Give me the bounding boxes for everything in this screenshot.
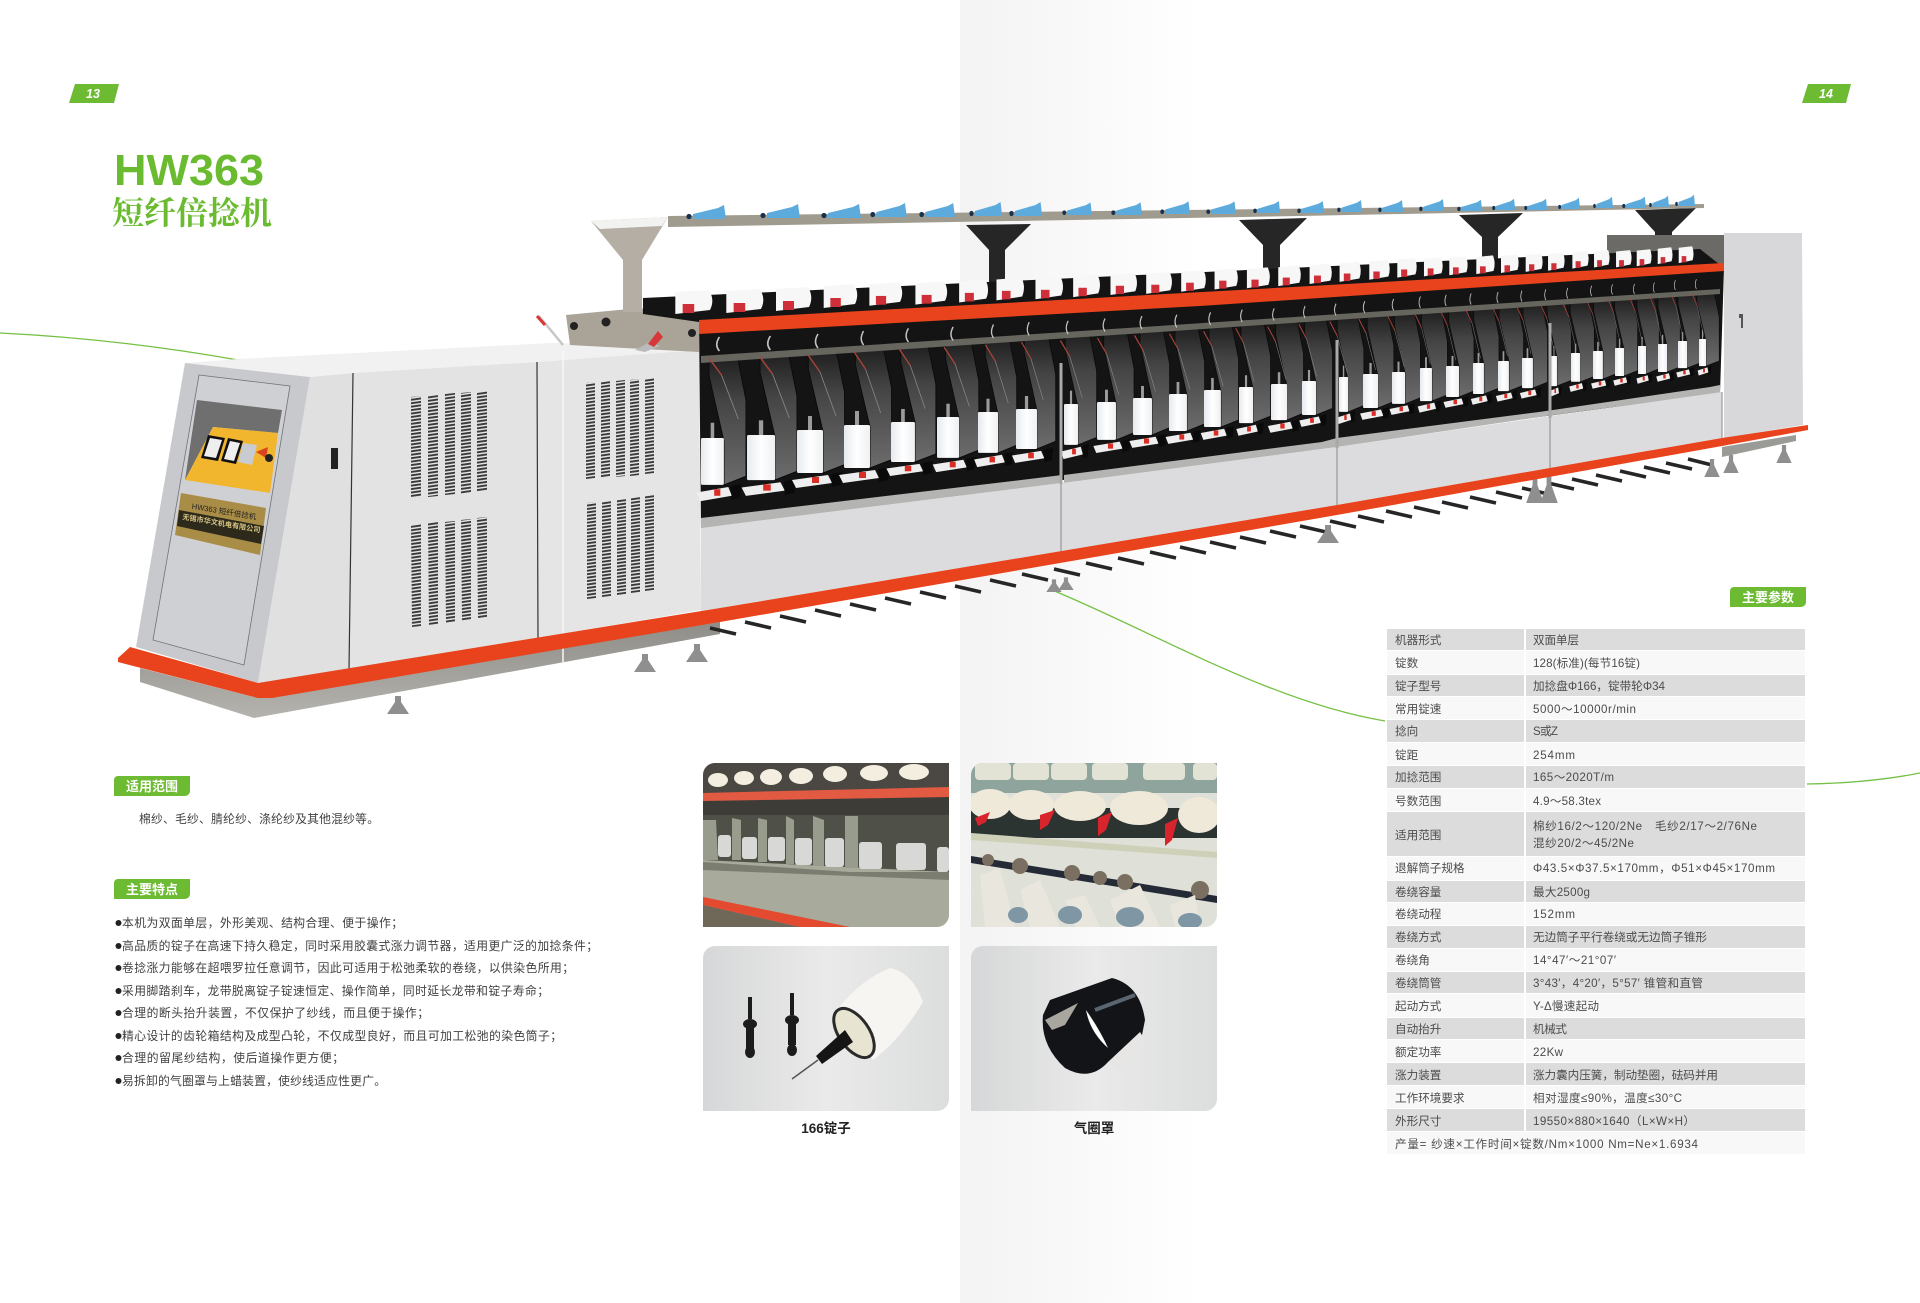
- specification table: 5000～10000r/min: [1533, 703, 1636, 716]
- spindles: [743, 993, 799, 1058]
- title: 短纤倍捻机: [112, 195, 272, 231]
- specification table: 加捻盘Φ166，锭带轮Φ34: [1533, 679, 1666, 693]
- control window: [185, 400, 282, 493]
- feature list: 高品质的锭子在高速下持久稳定，同时采用胶囊式涨力调节器，适用更广泛的加捻条件；: [122, 939, 598, 953]
- photo panel: balloon control ring: [971, 946, 1217, 1111]
- red upper rail: [699, 263, 1724, 334]
- specification table: S或Z: [1533, 725, 1558, 738]
- page number tag 13: 13: [86, 87, 100, 101]
- feature list: 合理的断头抬升装置，不仅保护了纱线，而且便于操作；: [122, 1006, 429, 1020]
- drive head mechanism: [537, 308, 699, 352]
- specification table: 卷绕角: [1395, 953, 1430, 967]
- machine base shadow and underframe: [140, 622, 720, 718]
- specification table: 152mm: [1533, 908, 1575, 921]
- title: [112, 146, 272, 231]
- page number tag 13: [69, 84, 119, 103]
- specification table: 19550×880×1640（L×W×H）: [1533, 1114, 1695, 1128]
- specification table: 涨力装置: [1395, 1068, 1441, 1082]
- applicable yarn text: 棉纱、毛纱、腈纶纱、涤纶纱及其他混纱等。: [139, 812, 379, 826]
- nameplate: 无锡市华文机电有限公司: [182, 512, 261, 535]
- twisting heads row: [675, 246, 1704, 419]
- separator plates: [709, 290, 1719, 485]
- red base strip: [118, 425, 1808, 698]
- feature list: 采用脚踏刹车，龙带脱离锭子锭速恒定、操作简单，同时延长龙带和锭子寿命；: [122, 984, 549, 998]
- section posts: [1061, 323, 1550, 484]
- specification table: 混纱20/2～45/2Ne: [1533, 837, 1634, 850]
- creel supports: dark funnels: [966, 208, 1696, 285]
- ventilation slots: [411, 378, 654, 627]
- specification table: 常用锭速: [1395, 702, 1442, 716]
- machine illustration: [118, 195, 1808, 718]
- horizontal beam: [701, 289, 1720, 363]
- right end cabinet: [1724, 233, 1803, 438]
- panel seams: [1061, 392, 1722, 553]
- right base support: [1722, 435, 1796, 457]
- section tag: 主要参数: 主要参数: [1742, 590, 1794, 605]
- feature list: 本机为双面单层，外形美观、结构合理、便于操作；: [122, 916, 403, 930]
- section tag: 主要参数: [1730, 587, 1806, 607]
- specification table: 工作环境要求: [1395, 1091, 1465, 1105]
- specification table: 起动方式: [1395, 999, 1442, 1013]
- specification table: 卷绕动程: [1395, 907, 1442, 921]
- green curve: left: [0, 333, 238, 360]
- lower front panels: [701, 392, 1722, 611]
- specification table: 退解筒子规格: [1395, 861, 1465, 875]
- photo panel: spindle parts: [703, 946, 949, 1111]
- specification table: 号数范围: [1395, 794, 1441, 808]
- specification table: [1387, 629, 1805, 1154]
- machine feet: [387, 445, 1792, 714]
- floor bars under machine: [710, 459, 1712, 634]
- specification table: 卷绕方式: [1395, 930, 1442, 944]
- blue cones on rail: [686, 195, 1695, 219]
- specification table: 无边筒子平行卷绕或无边筒子锥形: [1533, 930, 1707, 944]
- spindle bay interior: [643, 249, 1724, 528]
- section tag: 主要特点: [114, 879, 190, 899]
- specification table: 机器形式: [1395, 633, 1442, 647]
- photo: machine close-up: [703, 763, 949, 927]
- feature list: 卷捻涨力能够在超喂罗拉任意调节，因此可适用于松弛柔软的卷绕，以供染色所用；: [122, 961, 574, 975]
- right cabinet handle: [1739, 314, 1743, 328]
- specification table: 卷绕筒管: [1395, 976, 1441, 990]
- specification table: 适用范围: [1395, 828, 1441, 842]
- cabinet handle: [331, 448, 338, 469]
- specification table: 锭子型号: [1395, 679, 1441, 693]
- specification table: 相对湿度≤90%，温度≤30°C: [1533, 1091, 1682, 1105]
- specification table: 额定功率: [1395, 1045, 1442, 1059]
- specification table: 卷绕容量: [1395, 885, 1442, 899]
- specification table: 4.9～58.3tex: [1533, 795, 1601, 808]
- feature list: 易拆卸的气圈罩与上蜡装置，使纱线适应性更广。: [122, 1074, 386, 1088]
- green curve: middle: [1052, 590, 1385, 721]
- control cabinet: [136, 343, 701, 683]
- feature list: 精心设计的齿轮箱结构及成型凸轮，不仅成型良好，而且可加工松弛的染色筒子；: [122, 1029, 562, 1043]
- lower gray rails: [701, 385, 1720, 528]
- specification table: 产量= 纱速×工作时间×锭数/Nm×1000 Nm=Ne×1.6934: [1395, 1137, 1699, 1151]
- specification table: 双面单层: [1533, 634, 1579, 647]
- specification table: 165～2020T/m: [1533, 771, 1614, 784]
- specification table: 棉纱16/2～120/2Ne 毛纱2/17～2/76Ne: [1533, 819, 1757, 833]
- page number tag 14: [1802, 84, 1851, 103]
- specification table: 锭距: [1395, 748, 1419, 762]
- specification table: 锭数: [1395, 656, 1419, 670]
- caption: 气圈罩: 气圈罩: [1074, 1121, 1114, 1136]
- section tag: 适用范围: 适用范围: [126, 779, 178, 794]
- nameplate: HW363 短纤倍捻机: [191, 501, 257, 522]
- specification table: Φ43.5×Φ37.5×170mm，Φ51×Φ45×170mm: [1533, 862, 1775, 875]
- right end dark panel: [1607, 235, 1724, 272]
- specification table: 自动抬升: [1395, 1022, 1442, 1036]
- specification table: 254mm: [1533, 749, 1575, 762]
- creel support: left silver stand: [591, 217, 668, 312]
- feature list: 合理的留尾纱结构，使后道操作更方便；: [122, 1051, 344, 1065]
- specification table: 外形尺寸: [1395, 1114, 1441, 1128]
- spindle cutaway with bobbin: [792, 968, 923, 1079]
- specification table: 22Kw: [1533, 1046, 1564, 1059]
- photo: spindle assembly close-up: [969, 763, 1220, 929]
- specification table: 加捻范围: [1395, 770, 1441, 784]
- yarn packages and trays: [697, 330, 1711, 501]
- cabinet door inset: [153, 375, 290, 665]
- page number tag 14: 14: [1819, 87, 1833, 101]
- section tag: 适用范围: [114, 776, 190, 796]
- nameplate: [175, 493, 266, 555]
- specification table: 捻向: [1395, 724, 1418, 738]
- specification table: 涨力囊内压簧，制动垫圈，砝码并用: [1533, 1068, 1718, 1082]
- caption: 166锭子: 166锭子: [801, 1120, 851, 1136]
- green curve: right: [1807, 773, 1920, 784]
- specification table: 机械式: [1533, 1022, 1567, 1036]
- specification table: 128(标准)(每节16锭): [1533, 656, 1640, 670]
- specification table: 14°47′～21°07′: [1533, 954, 1616, 967]
- specification table: 最大2500g: [1533, 885, 1590, 899]
- overhead creel rail: [668, 204, 1704, 227]
- specification table: 3°43′，4°20′，5°57′ 锥管和直管: [1533, 976, 1703, 990]
- section tag: 主要特点: 主要特点: [126, 882, 178, 897]
- head plate tab: [648, 331, 663, 347]
- specification table: Y-Δ慢速起动: [1533, 1000, 1599, 1013]
- feature list: [116, 916, 598, 1088]
- title: HW363: [114, 146, 264, 195]
